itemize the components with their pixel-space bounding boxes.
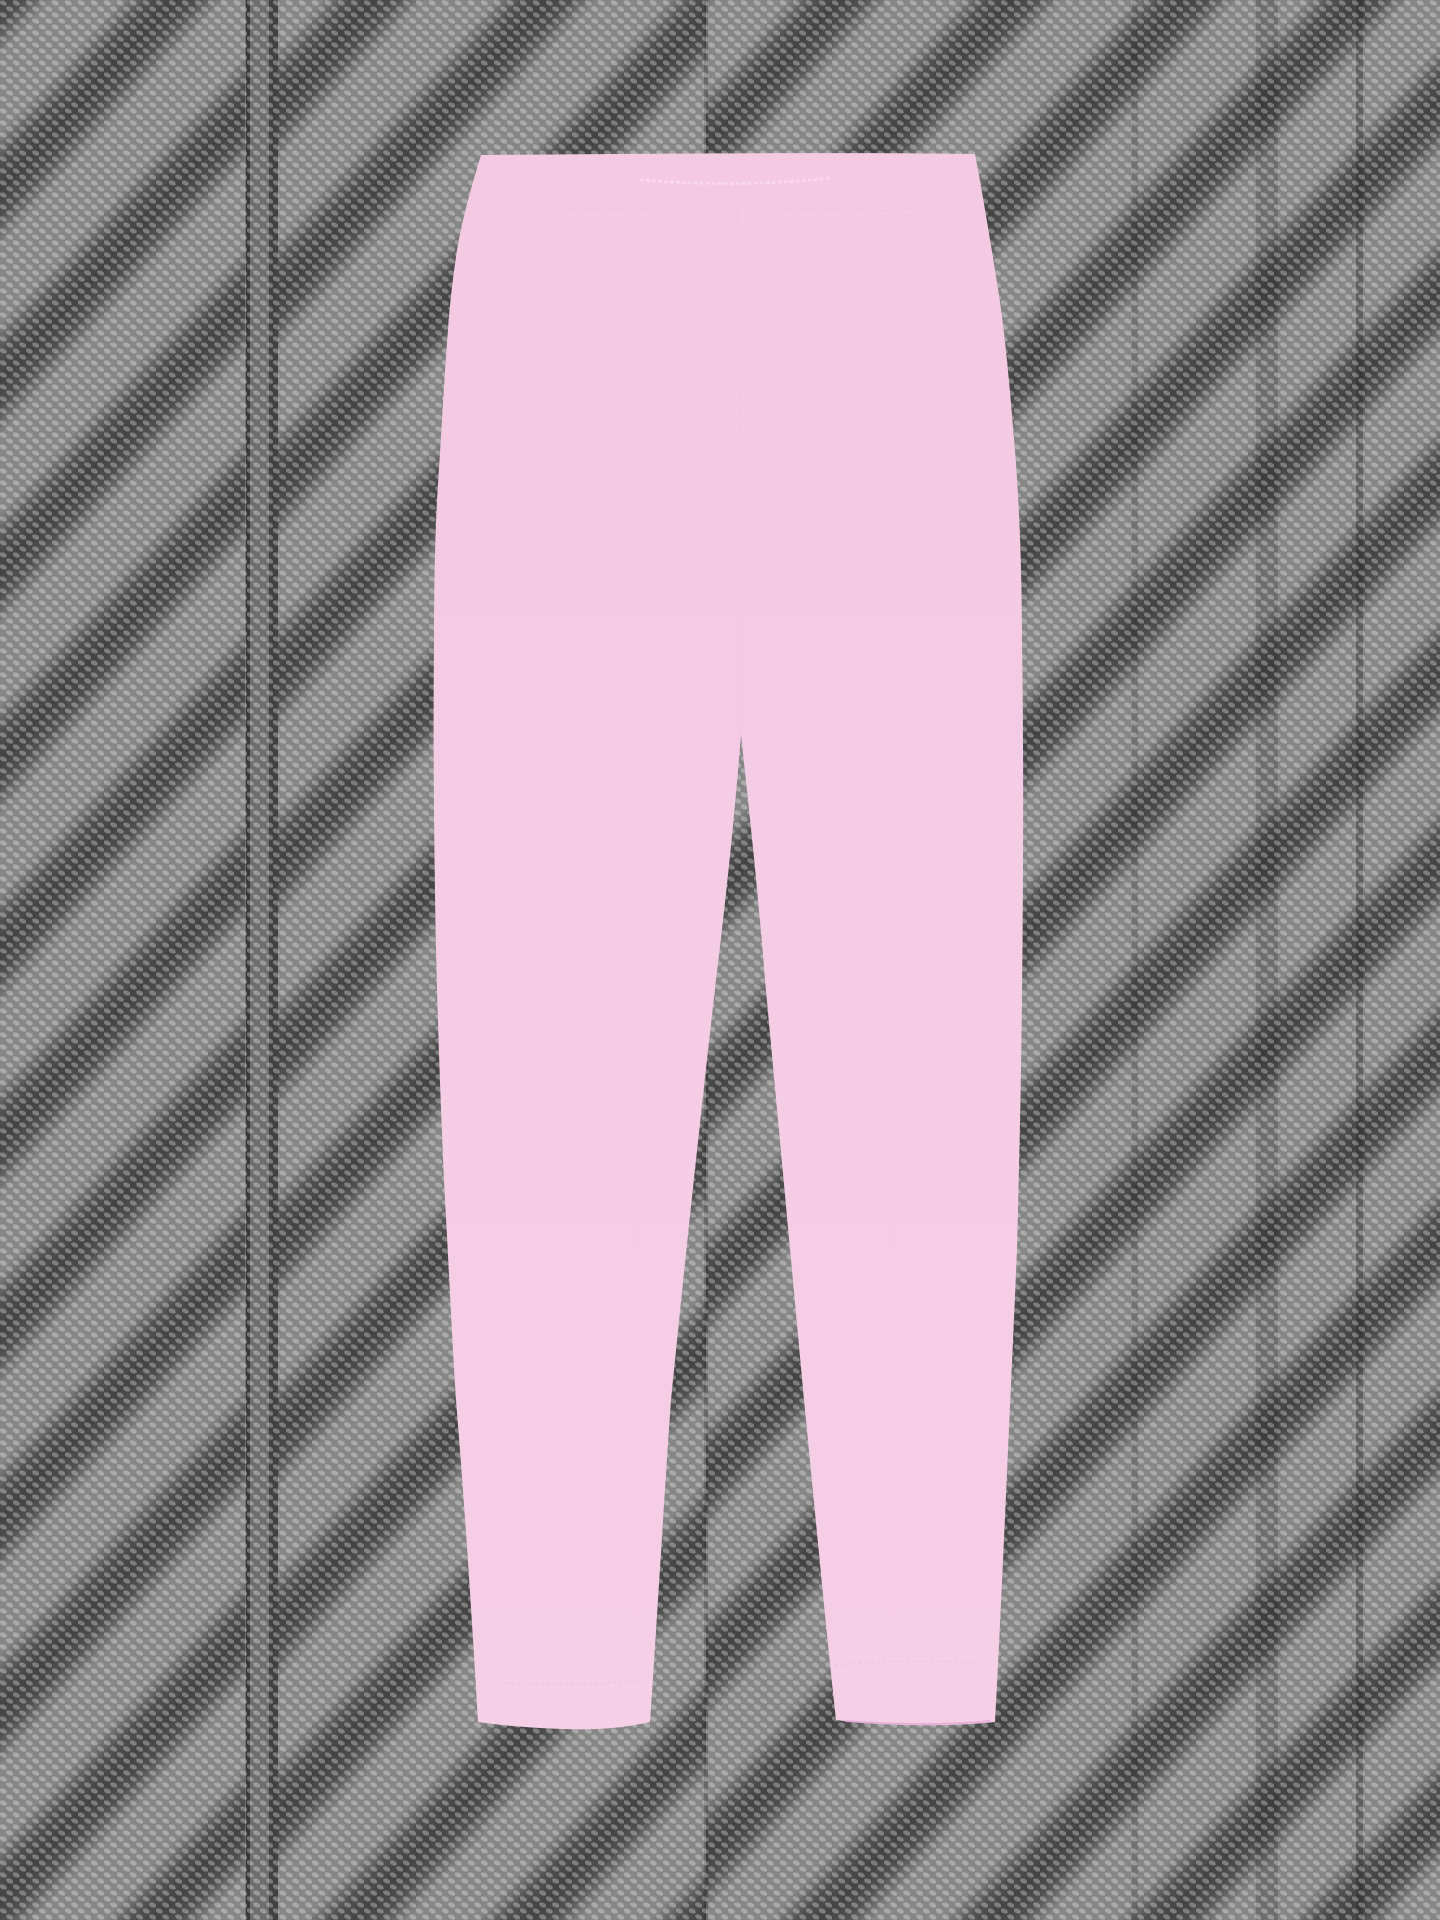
- waistband stitching: [555, 212, 920, 216]
- knit panel: centre cable: [278, 0, 706, 1920]
- rib column between seams: [245, 0, 278, 1920]
- leggings: [434, 153, 1023, 1729]
- knit panel: right cable: [706, 0, 1440, 1920]
- vertical rib seams: [246, 0, 1363, 1920]
- waist top highlight: [640, 178, 830, 184]
- left hem stitching: [505, 1680, 640, 1684]
- leggings silhouette: [434, 153, 1023, 1729]
- centre seam: [738, 200, 741, 735]
- right hem stitching: [835, 1661, 997, 1665]
- knit panel: left cable: [0, 0, 245, 1920]
- right hem bottom edge: [845, 1721, 990, 1724]
